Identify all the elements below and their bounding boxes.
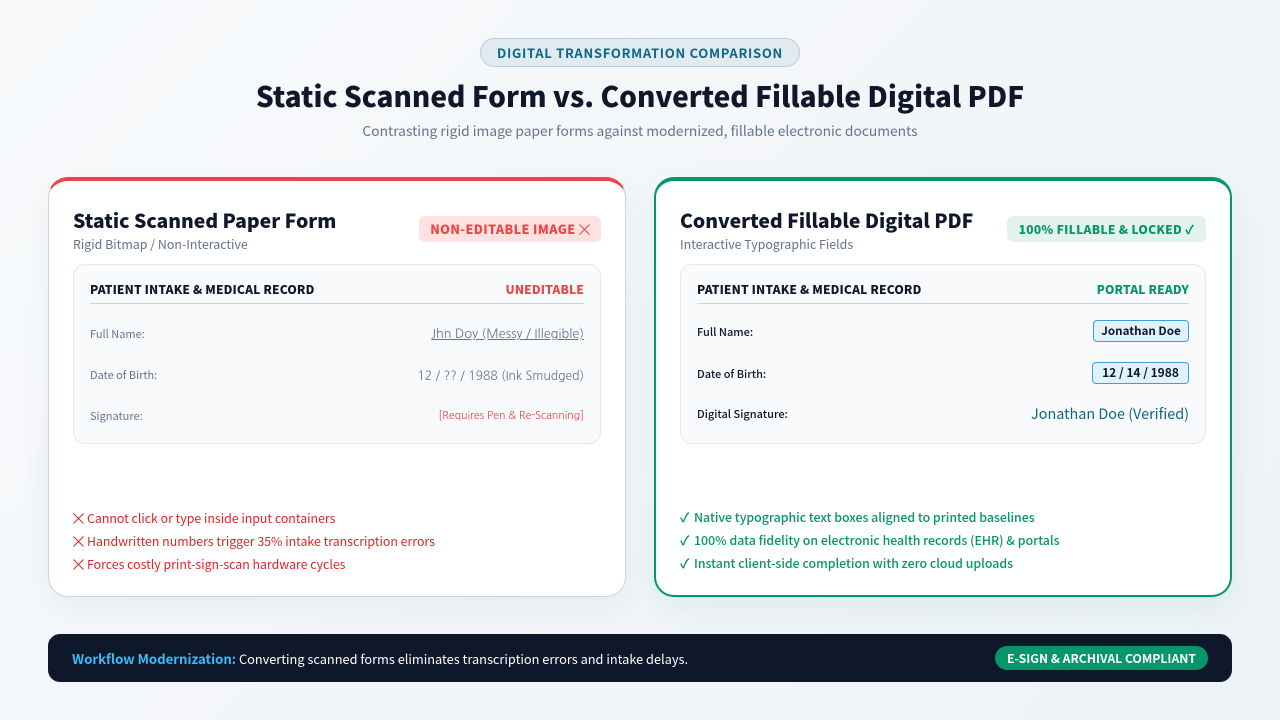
panel subheading: Interactive Typographic Fields xyxy=(680,235,853,253)
benefit list xyxy=(680,507,1060,572)
field value: signature required: [Requires Pen & Re-Scanning] xyxy=(438,410,584,421)
drawback list xyxy=(73,509,435,573)
field value: smudged date: 12 / ?? / 1988 (Ink Smudged) xyxy=(417,370,584,382)
drawback 3: Forces costly print-sign-scan hardware cycles xyxy=(87,555,345,573)
input: date of birth: 12 / 14 / 1988 xyxy=(1102,364,1179,381)
compliance badge xyxy=(995,646,1208,670)
input: date of birth xyxy=(1092,362,1189,384)
form mock: fillable xyxy=(680,264,1206,444)
form title: PATIENT INTAKE & MEDICAL RECORD xyxy=(90,281,314,298)
field label: digital signature: Digital Signature: xyxy=(697,406,788,422)
benefit 2: 100% data fidelity on electronic health records (EHR) & portals xyxy=(694,531,1060,549)
panel: static scanned paper form xyxy=(48,177,626,597)
title: Static Scanned Form vs. Converted Fillable Digital PDF xyxy=(256,76,1024,116)
drawback 1: Cannot click or type inside input containers xyxy=(87,509,335,527)
benefit 1: Native typographic text boxes aligned to printed baselines xyxy=(694,508,1035,526)
status badge: non-editable xyxy=(419,216,601,242)
panel subheading: Rigid Bitmap / Non-Interactive xyxy=(73,235,248,253)
footer message: Workflow Modernization: Converting scanned forms eliminates transcription errors and intake delays. xyxy=(72,649,688,668)
status badge: non-editable: NON-EDITABLE IMAGE xyxy=(430,219,576,238)
input: full name xyxy=(1093,320,1189,342)
compliance badge: E-SIGN & ARCHIVAL COMPLIANT xyxy=(1007,649,1196,667)
panel: converted fillable digital PDF xyxy=(654,177,1232,597)
field label: date of birth: Date of Birth: xyxy=(90,367,157,383)
input: full name: Jonathan Doe xyxy=(1101,323,1181,339)
status badge: fillable: 100% FILLABLE & LOCKED ✓ xyxy=(1019,221,1194,238)
benefit 3: ✓ xyxy=(680,553,689,572)
benefit 3: Instant client-side completion with zero cloud uploads xyxy=(694,554,1013,572)
benefit 1: ✓ xyxy=(680,507,689,526)
form mock: scanned xyxy=(73,264,601,444)
drawback 2: Handwritten numbers trigger 35% intake transcription errors xyxy=(87,532,435,550)
subtitle: Contrasting rigid image paper forms against modernized, fillable electronic documents xyxy=(362,120,918,140)
benefit 2: ✓ xyxy=(680,530,689,549)
field value: signature: Jonathan Doe (Verified) xyxy=(1031,403,1189,424)
form status: UNEDITABLE xyxy=(506,281,584,298)
field label: date of birth: Date of Birth: xyxy=(697,366,766,382)
form title: PATIENT INTAKE & MEDICAL RECORD xyxy=(697,281,921,298)
field value: messy name: Jhn Doy (Messy / Illegible) xyxy=(431,327,584,340)
field label: full name: Full Name: xyxy=(90,326,145,342)
field label: full name: Full Name: xyxy=(697,324,753,340)
panel heading: Static Scanned Paper Form xyxy=(73,205,336,234)
footer bar xyxy=(48,634,1232,682)
field label: signature: Signature: xyxy=(90,408,143,424)
panel heading: Converted Fillable Digital PDF xyxy=(680,205,973,234)
eyebrow badge xyxy=(480,38,800,67)
form status: PORTAL READY xyxy=(1097,281,1189,298)
status badge: fillable xyxy=(1007,216,1206,242)
eyebrow badge: DIGITAL TRANSFORMATION COMPARISON xyxy=(497,43,783,62)
